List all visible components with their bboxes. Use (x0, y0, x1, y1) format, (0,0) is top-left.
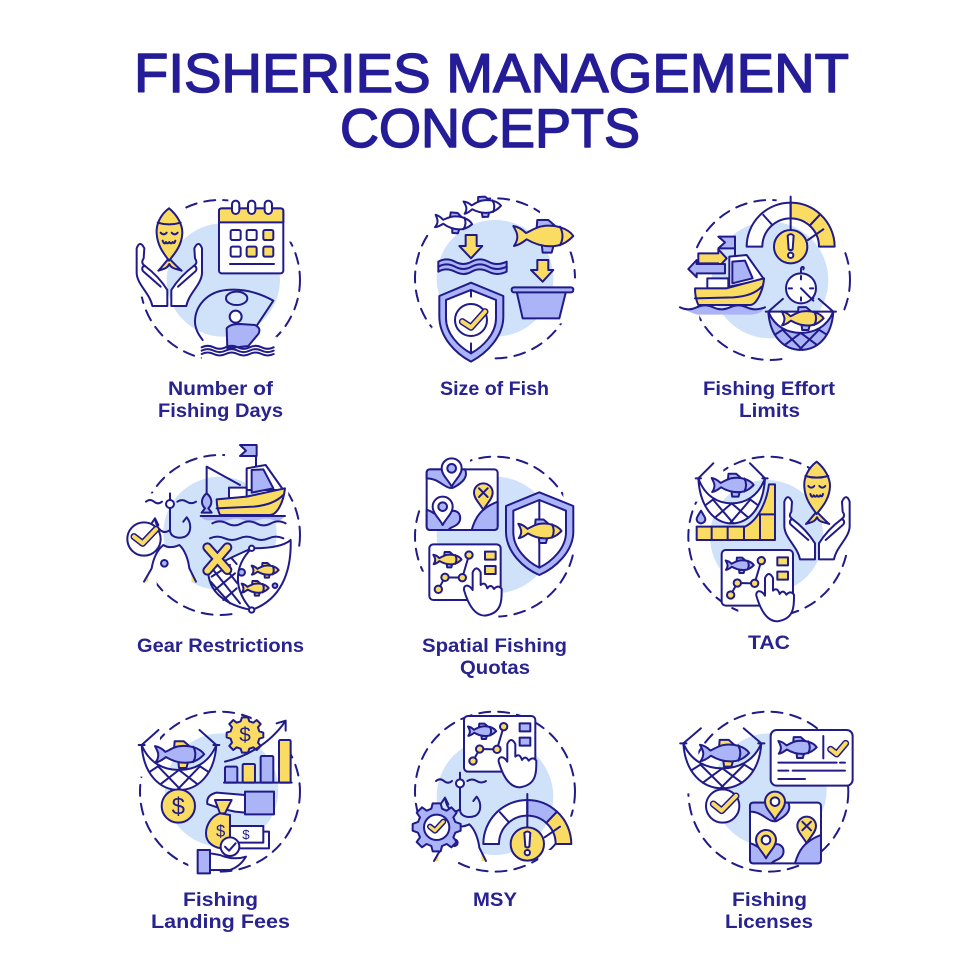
label: Licenses (725, 912, 813, 933)
label: Landing Fees (151, 912, 290, 933)
panel: Fishing Landing Fees (133, 710, 300, 933)
label: MSY (473, 890, 517, 911)
title (134, 42, 849, 159)
icon: fish sizes, shield and bucket (410, 190, 583, 371)
label: Fishing Effort (703, 379, 836, 400)
label (158, 379, 283, 422)
label: Gear Restrictions (137, 636, 304, 657)
label: Number of (168, 379, 274, 400)
icon: net, coin, growth chart, money bag: $ (242, 827, 250, 842)
label: TAC (748, 633, 790, 654)
icon: net, coin, growth chart, money bag (133, 710, 300, 880)
icon: net, bar chart, hands and touch panel (683, 457, 857, 625)
icon: touch panel, hook, gear and gauge (413, 712, 583, 877)
panel: Gear Restrictions (127, 440, 305, 657)
label: Fishing (183, 890, 258, 911)
icon: net, licence card and map (680, 712, 853, 872)
icon: boat, hook and net (127, 440, 305, 620)
label: Fishing Days (158, 401, 283, 422)
label: Quotas (460, 658, 530, 679)
panel: Fishing Effort Limits (680, 190, 855, 422)
panel: Number of Fishing Days (130, 190, 300, 422)
label: Limits (739, 401, 800, 422)
label: Spatial Fishing (422, 636, 567, 657)
title: CONCEPTS (340, 97, 640, 159)
label (422, 636, 567, 679)
icon: map, shield and touch panel (410, 445, 583, 625)
icon: net, coin, growth chart, money bag: $ (216, 822, 225, 841)
panel: MSY (413, 712, 583, 911)
icon: net, coin, growth chart, money bag: $ (239, 724, 251, 747)
label: Size of Fish (440, 379, 549, 400)
icon: boat, gauge, stopwatch and net (680, 190, 855, 370)
icon: fish in hands, calendar and angler (130, 190, 300, 370)
panel: TAC (683, 457, 857, 654)
panel: Spatial Fishing Quotas (410, 445, 583, 679)
label (151, 890, 290, 933)
label (725, 890, 813, 933)
panel: Fishing Licenses (680, 712, 853, 933)
title: FISHERIES MANAGEMENT (134, 42, 849, 104)
icon: net, coin, growth chart, money bag: $ (172, 794, 185, 821)
label (703, 379, 836, 422)
panel: Size of Fish (410, 190, 583, 400)
label: Fishing (732, 890, 807, 911)
